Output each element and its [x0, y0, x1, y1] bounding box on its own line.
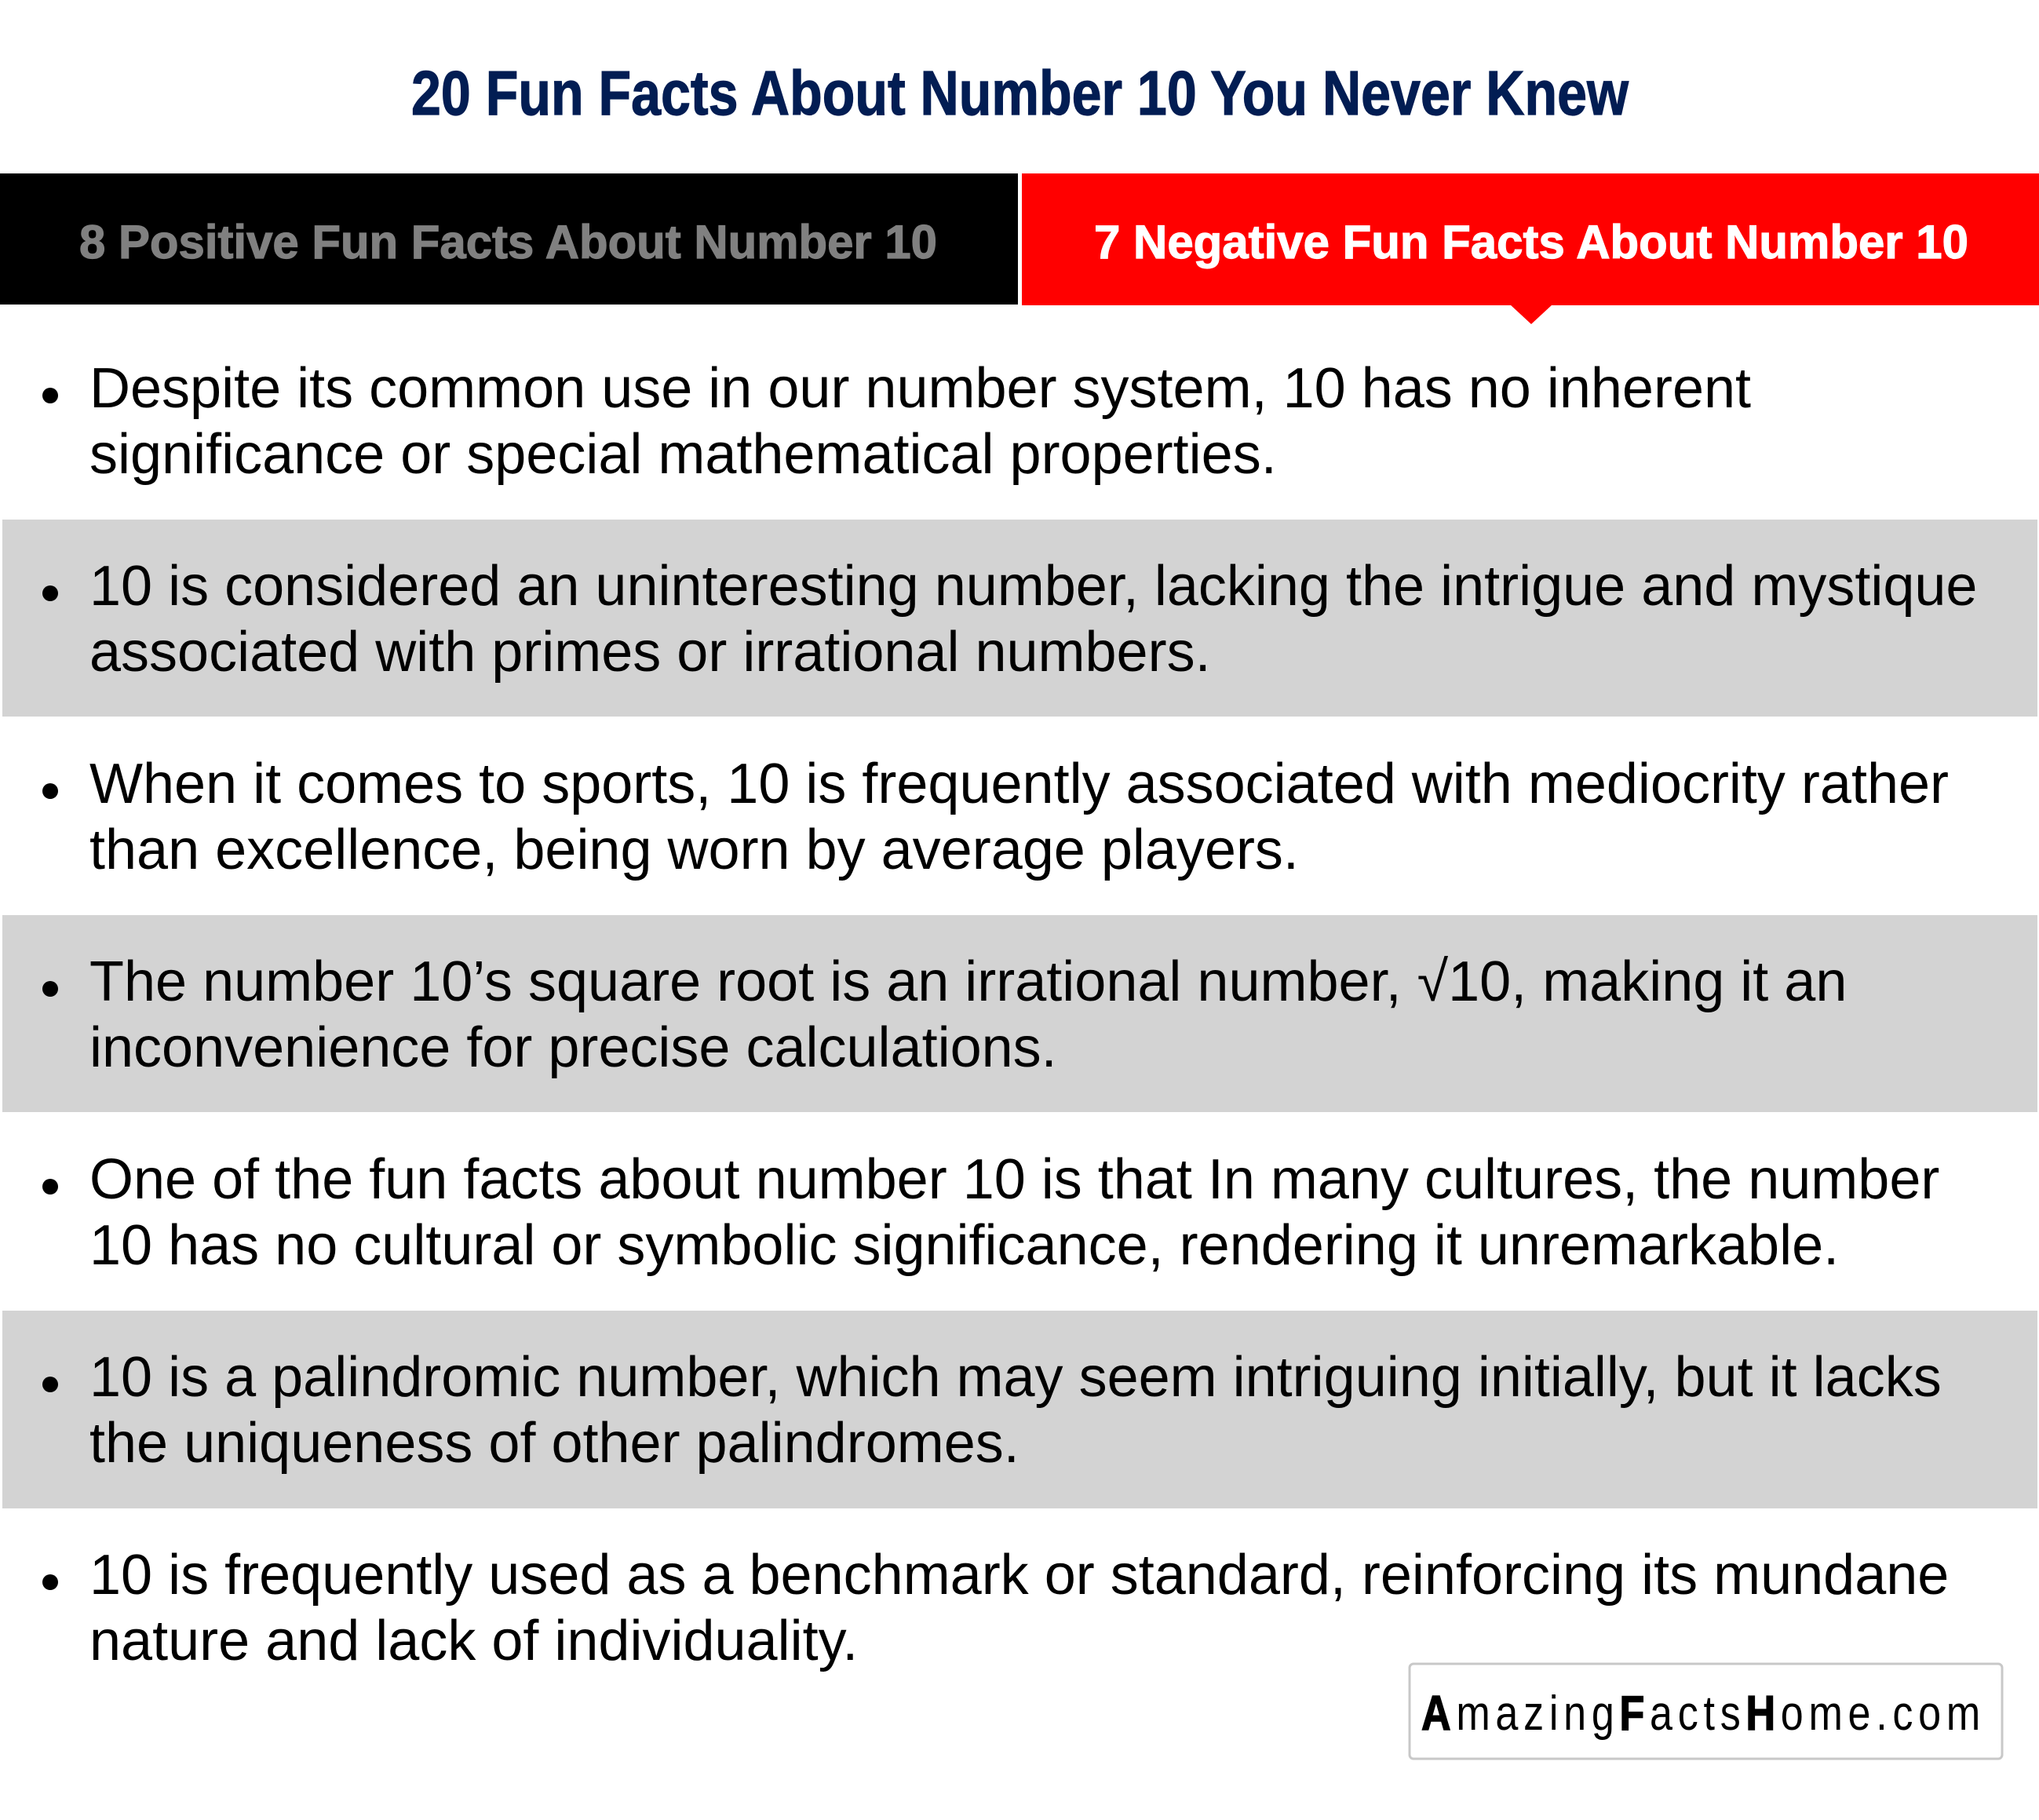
- tab: negative facts: [1022, 173, 2039, 324]
- fact 7: [42, 1544, 1949, 1672]
- watermark: AmazingFactsHome.com: [1410, 1664, 2002, 1759]
- fact 5: 10 has no cultural or symbolic significance, rendering it unremarkable.: [89, 1214, 1839, 1277]
- fact 5: [42, 1148, 1939, 1277]
- fact 4: The number 10’s square root is an irrational number, √10, making it an: [89, 950, 1847, 1013]
- fact 4: inconvenience for precise calculations.: [89, 1016, 1057, 1079]
- fact 5: One of the fun facts about number 10 is that In many cultures, the number: [89, 1148, 1939, 1211]
- tab: positive facts: 8 Positive Fun Facts About Number 10: [79, 216, 937, 268]
- fact 3: than excellence, being worn by average players.: [89, 819, 1299, 881]
- fact 2: [2, 520, 2037, 717]
- tab: negative facts: 7 Negative Fun Facts About Number 10: [1094, 216, 1968, 268]
- fact 2: associated with primes or irrational numbers.: [89, 621, 1211, 684]
- fact 3: When it comes to sports, 10 is frequently associated with mediocrity rather: [89, 753, 1949, 815]
- fact 2: 10 is considered an uninteresting number, lacking the intrigue and mystique: [89, 555, 1977, 618]
- fact 1: [42, 357, 1751, 486]
- fact 7: nature and lack of individuality.: [89, 1610, 858, 1672]
- fact 6: [2, 1311, 2037, 1508]
- fact 1: Despite its common use in our number system, 10 has no inherent: [89, 357, 1751, 420]
- watermark: AmazingFactsHome.com: AmazingFactsHome.com: [1421, 1687, 1986, 1741]
- title: 20 Fun Facts About Number 10 You Never Knew: [411, 58, 1629, 128]
- fact 3: [42, 753, 1949, 881]
- fact 6: 10 is a palindromic number, which may seem intriguing initially, but it lacks: [89, 1346, 1942, 1409]
- fact 6: the uniqueness of other palindromes.: [89, 1412, 1020, 1475]
- fact 7: 10 is frequently used as a benchmark or standard, reinforcing its mundane: [89, 1544, 1949, 1607]
- tab: positive facts: [0, 173, 1018, 305]
- fact 4: [2, 915, 2037, 1112]
- fact 1: significance or special mathematical properties.: [89, 423, 1277, 486]
